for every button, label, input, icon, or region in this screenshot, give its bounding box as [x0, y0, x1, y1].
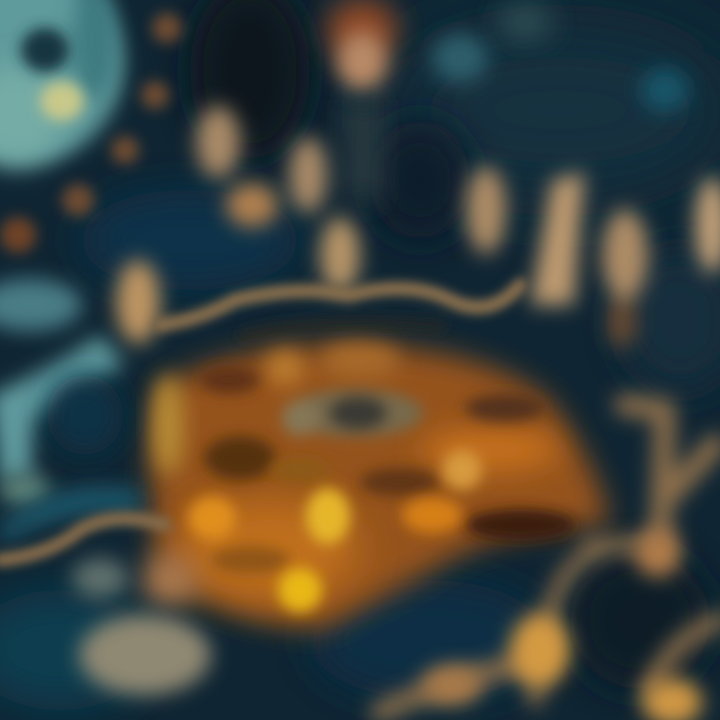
- pegs: tan upright shapes in the upper middle: [116, 106, 360, 344]
- traces: tan circuit branches at lower right: [380, 405, 720, 712]
- trace: tan wave at lower left: [0, 519, 165, 560]
- pegs: tan upright shapes on the right: [466, 166, 720, 348]
- shape: teal branching form at left: [0, 279, 140, 545]
- central mass: glowing orange circuit: [142, 342, 610, 630]
- disc: beige oval at bottom left: [72, 558, 211, 695]
- nodes: glowing amber terminals at lower right: [422, 529, 702, 720]
- beads: brown dotted arc around the circle: [0, 13, 182, 253]
- trace: tan wavy line above the central mass: [160, 285, 520, 335]
- glow: orange node at top: [326, 0, 398, 200]
- icon: teal gear circle, top left: [0, 0, 123, 165]
- glow: teal spots at upper right: [432, 4, 689, 112]
- chip: grey ring at centre of the mass: [282, 389, 423, 437]
